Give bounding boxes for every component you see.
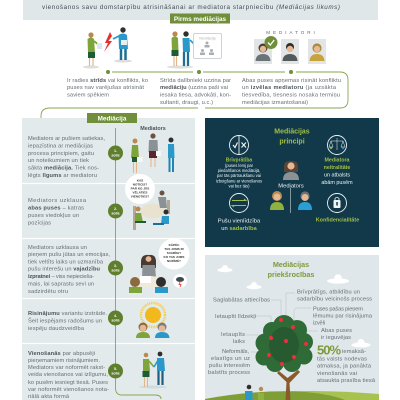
icon: round table talk with speech bubble [125,174,170,230]
step badges: solis [111,154,120,158]
text: voluntariness: Brīvprātība [226,158,252,164]
icon: people at mediation board: Mediācija [199,36,217,40]
hill [205,391,379,400]
icon: mediator bust: Mediators [278,184,304,190]
text: step 2 [28,198,87,226]
panel: mediation steps [22,118,195,400]
text: step three before mediation: mediācijas izmantošanai) [242,100,308,106]
benefit labels left: elastīgs un uz [211,356,250,362]
title: Mediācijas [274,128,310,136]
icon: mediator listening with speech bubbles: KO TAS JUMS [164,255,184,259]
text: step 5: var noformēt vienošanos nota- [28,387,109,393]
benefit labels left: Ietaupīti līdzekļi [215,314,256,320]
title: principi [279,138,305,146]
text: step one before mediation [67,78,148,98]
text: step 5 [28,351,109,400]
text: equality [218,218,261,232]
icon: equality arrows [230,194,248,212]
step badges: solis [111,268,120,272]
text: step 1: procesa principiem, gaitu [28,151,94,157]
step badges [108,146,123,378]
callout: 50% [317,342,376,384]
text: step two before mediation: iesaka tiesa, advokāti, kon- [160,92,231,98]
callout: 50%: tās valsts nodevas [317,356,367,362]
benefit labels right: Puses pašas pieņem [313,306,363,312]
step badges: solis [111,212,120,216]
icon: neutrality scales [328,136,346,154]
step badges: solis [111,318,120,322]
flow line: top process [41,70,348,146]
title: priekšrocības [268,270,314,279]
text: step three before mediation: un izvēlas mediatoru (ja uzsākta [242,85,337,91]
icon: round table talk with speech bubble: PAR KO JŪS [131,186,149,190]
text: voluntariness: izbeigšanu ar vienošanos [216,178,262,184]
text: neutrality: abām pusēm [321,180,353,186]
text: step 1: un noteikumiem un tiek [28,158,89,164]
clouds [218,265,370,348]
icon: conflict people [83,27,132,68]
text: neutrality: neitralitāte [324,165,350,171]
benefit labels left: laiks [233,339,245,345]
icon: mediator bust [278,161,304,190]
step badges: 1. [114,149,117,153]
text: step three before mediation: Abas puses apņemas risināt konfliktu [242,78,341,84]
text: step one before mediation: Ir radies strīds vai konflikts, ko [67,78,148,84]
text: step 5: ko pusēm iesniegt tiesā. Puses [28,380,108,386]
icon: mediators portraits: MEDIATORI [266,30,318,35]
text: step three before mediation: tiesvedība, tiesnesis nosaka termiņu [242,92,340,98]
benefit labels right: izvēli [313,320,325,326]
text: step 3: mais, lai saprastu sevi un [28,282,94,288]
text: step 1: sākta mediācija. Tiek nos- [28,166,99,172]
text: step 1: Mediators ar pušiem satiekas, [28,136,105,142]
icon: two parties [270,188,312,213]
benefit labels left: Neformāls, [222,349,249,355]
step badges: 3. [114,264,117,268]
icon: round table talk with speech bubble: VĒLATIES [133,190,147,194]
text: step 4: Šeit iespējams radošums un [28,318,102,324]
text: step 4 [28,311,107,332]
benefit labels right: Brīvprātīgs, atbildību un [297,290,360,296]
benefit labels left: pušu interesēm [209,363,250,369]
heading: Mediācija [87,113,137,123]
step badges: 4. [114,314,117,318]
text: equality: un sadarbība [221,226,257,232]
icon: mediator listening with speech bubbles: TAS JUMS IR [164,247,184,251]
tree [256,315,313,400]
step badges: solis [111,372,120,376]
text: neutrality [321,158,353,186]
benefit labels right [297,290,373,341]
icon: three people with mediator: Mediators [140,126,166,132]
icon: round table talk with speech bubble: VIENOTIES? [131,194,149,198]
text: step 3: tiek veltīts laiks un uzmanība [28,260,104,266]
text: step 4: Risinājumu variantu izstrāde. [28,311,107,317]
text: step 5: veida vienošanos vai izlīgumu, [28,372,108,378]
text: neutrality: Mediatora [324,158,350,164]
text: step two before mediation: sultanti, draugi, u.c.) [160,100,213,106]
text: step 3 [28,245,110,295]
text: step 1: lēgts līgums ar mediatoru [28,173,97,179]
text: step 5: Mediators var noformēt rakst- [28,365,105,371]
text: voluntariness [216,158,262,189]
text: equality: Pušu vienlīdzība [218,218,261,224]
callout: 50%: vienošanās vai [317,371,357,377]
text: voluntariness: (puses lemj par [225,163,254,168]
text: step 3: pušu interešu un vajadzību [28,266,101,272]
icon: mediator listening with speech bubbles: SVARĪGI? [167,251,181,255]
title [274,128,310,146]
text: neutrality: un atbalsts [324,172,350,178]
callout: 50%: iemaksā- [342,349,366,355]
text: step 3: pieņem pušu jūtas un emocijas, [28,252,110,258]
text: step 2: abas puses – katras [28,206,84,212]
text: voluntariness: piedalīšanos mediācijā, [218,168,260,173]
benefit labels right: lēmumu par risinājuma [313,314,373,320]
text: step 3: sadzirdētu otru [28,289,68,295]
step badges: 5. [114,367,117,371]
text: step 2: Mediators uzklausa [28,198,87,204]
callout: 50%: atmaksa, ja panākta [317,364,372,370]
people under tree [245,385,264,400]
text: step two before mediation: Strīda dalībnieki uzzina par [160,78,231,84]
icon: round table talk with speech bubble: NOTICIS? [133,182,147,186]
benefit labels left: Saglabātas attiecības [213,298,270,304]
callout: 50%: 50% [317,342,341,358]
benefit labels left [208,298,270,376]
text: step three before mediation [242,78,341,106]
icon: handshake [139,352,167,388]
icon: three people with mediator [131,126,174,173]
icon: voluntariness [230,136,248,154]
text: step 2: pozīcijas [28,220,51,226]
text: step 4: iespēju daudzveidība [28,326,85,332]
text: voluntariness: par tās pārtraukšanu vai [217,173,261,178]
text: step 3: izpratnei – viss nepiecieša- [28,274,94,280]
heading: Pirms mediācijas [170,14,230,24]
text: step 3: Mediators uzklausa un [28,245,87,251]
text: step 1: iepazīstina ar mediācijas [28,144,93,150]
benefit labels left: Ietaupīts [221,332,245,338]
icon: confidentiality lock [328,194,346,212]
text: step one before mediation: saviem spēkiem [67,92,109,98]
text: step one before mediation: puses nav varējušas atrisināt [67,85,144,91]
benefit labels right: ir ieguvējas [321,335,351,341]
text: step 5: riālā akta formā [28,394,70,400]
icon: sun and two people [136,303,170,338]
text: step 1 [28,136,105,179]
step badges: 2. [114,207,117,211]
icon: mediators portraits [254,30,326,64]
benefit labels right: Abas puses [321,328,352,334]
leader lines [246,293,318,352]
intro panel: vienošanos savu domstarpību atrisināšanai ar mediatora starpniecību (Mediācijas likums) [42,4,340,11]
icon: mediator listening with speech bubbles: NOZĪMĒ? [167,259,181,263]
intro panel [23,0,378,20]
icon: mediator listening with speech bubbles [129,238,190,293]
icon: round table talk with speech bubble: KAS [137,178,143,182]
title: Mediācijas [273,260,309,269]
title [268,260,314,279]
benefit labels right: sadarbību veicinošs process [297,296,372,302]
heading: Pirms mediācijas: Pirms mediācijas [174,16,227,23]
text: step 5: Vienošanās par abpusēji [28,351,95,357]
text: step 2: puses viedokļus un [28,213,79,219]
benefit labels left: balstīts process [208,370,250,376]
callout: 50%: atsaukta prasība tiesā [317,378,376,384]
text: step two before mediation [160,78,231,106]
text: step 5: pieņemamiem risinājumiem. [28,358,100,364]
text: voluntariness: vai bez tās) [229,184,250,189]
icon: mediator listening with speech bubbles: KĀPĒC [169,243,180,247]
heading: Mediācija: Mediācija [98,116,127,122]
panel: mediation principles [205,118,379,247]
icon: people at mediation board [167,31,222,68]
panel: mediation benefits [205,255,379,400]
text: step two before mediation: mediāciju (uzzina paši vai [160,85,228,91]
text: confidentiality: Konfidencialitāte [316,218,359,224]
